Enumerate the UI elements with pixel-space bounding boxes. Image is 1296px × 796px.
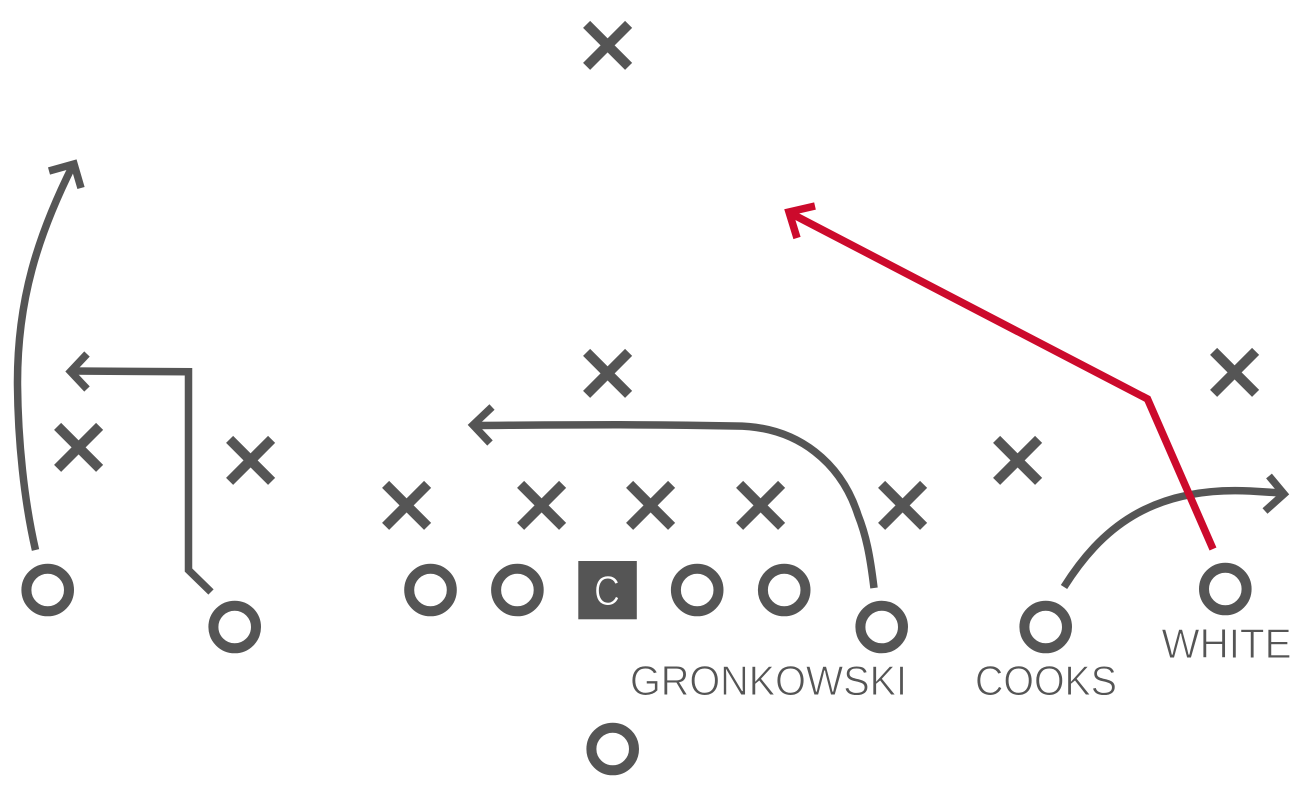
player label: Cooks: COOKS (975, 657, 1117, 704)
route: Gronkowski crossing route (473, 407, 874, 588)
route: far left go route (17, 164, 81, 550)
defensive players: X marks (58, 24, 1256, 526)
route: White highlighted route (789, 206, 1213, 549)
offensive players: O marks (26, 568, 1247, 770)
center marker: C (594, 567, 620, 614)
route: left out route (70, 354, 211, 592)
player label: Gronkowski: GRONKOWSKI (630, 657, 907, 704)
route: Cooks corner route (1064, 476, 1284, 587)
player label: White: WHITE (1162, 620, 1292, 667)
center marker (578, 561, 637, 619)
